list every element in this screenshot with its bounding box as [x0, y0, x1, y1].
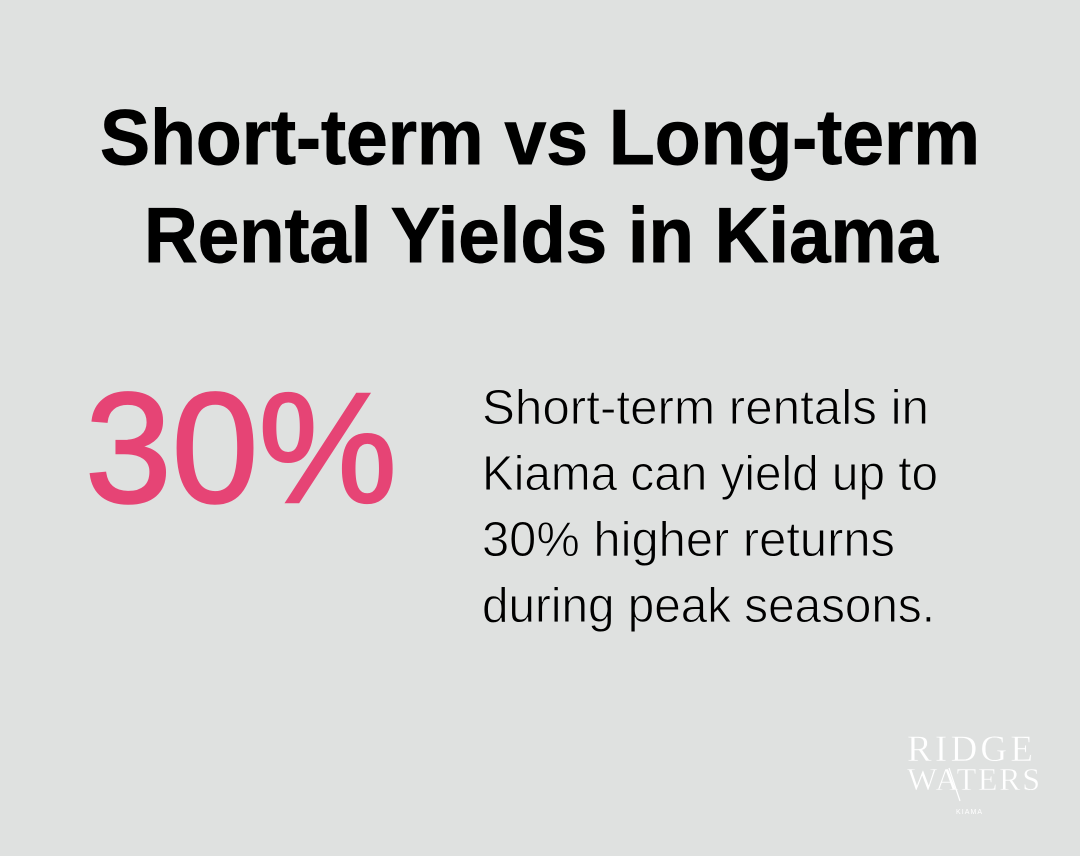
title: Rental Yields in Kiama	[144, 191, 939, 279]
logo: Ridge Waters Kiama	[907, 729, 1040, 816]
description text: Short-term rentals in	[482, 381, 929, 435]
description text: during peak seasons.	[482, 579, 935, 633]
big statistic: 30%: 30%	[85, 361, 397, 536]
description text: Kiama can yield up to	[482, 447, 938, 501]
title	[100, 93, 980, 279]
logo: Ridge Waters Kiama: WATERS	[907, 761, 1040, 797]
description text: 30% higher returns	[482, 513, 895, 567]
description text	[482, 381, 938, 633]
logo: Ridge Waters Kiama: RIDGE	[907, 729, 1033, 770]
title: Short-term vs Long-term	[100, 93, 980, 181]
logo: Ridge Waters Kiama: KIAMA	[956, 809, 982, 816]
